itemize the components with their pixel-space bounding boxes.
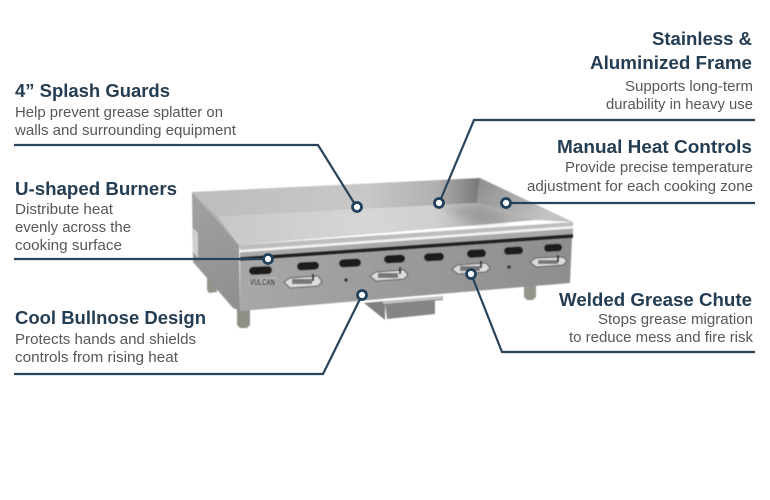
callout: stainless and aluminized frame: Stainless & bbox=[652, 29, 752, 49]
callout: manual heat controls bbox=[502, 137, 755, 208]
callout: stainless and aluminized frame: Supports long-term bbox=[625, 79, 753, 95]
callout: welded grease chute: to reduce mess and fire risk bbox=[569, 330, 754, 346]
callout: splash guards: walls and surrounding equipment bbox=[14, 123, 236, 139]
griddle front lip bbox=[239, 222, 573, 250]
callout: splash guards: Help prevent grease splatter on bbox=[15, 105, 223, 121]
griddle left splash guard bbox=[192, 192, 239, 245]
griddle front panel bbox=[240, 238, 572, 311]
brand badge bbox=[249, 277, 276, 287]
griddle cooking surface bbox=[218, 203, 537, 245]
griddle legs bbox=[207, 278, 536, 328]
control knob vents bbox=[249, 244, 562, 275]
callout: cool bullnose design: Cool Bullnose Design bbox=[15, 308, 206, 328]
grease chute bbox=[364, 296, 443, 320]
callout: welded grease chute bbox=[466, 270, 755, 352]
callout: splash guards: 4” Splash Guards bbox=[15, 81, 170, 101]
griddle product image bbox=[192, 178, 573, 328]
callout: cool bullnose design: Protects hands and shields bbox=[15, 332, 196, 348]
callout: cool bullnose design: controls from rising heat bbox=[15, 350, 178, 366]
callout: welded grease chute: Welded Grease Chute bbox=[559, 290, 752, 310]
callout: cool bullnose design bbox=[14, 290, 366, 374]
callout: manual heat controls: adjustment for each cooking zone bbox=[527, 179, 753, 195]
griddle side panel bbox=[192, 192, 240, 311]
callout: manual heat controls: Manual Heat Controls bbox=[557, 137, 752, 157]
callout: u-shaped burners: cooking surface bbox=[15, 238, 122, 254]
callout: stainless and aluminized frame: durability in heavy use bbox=[606, 97, 753, 113]
callout: stainless and aluminized frame bbox=[434, 29, 755, 208]
callout: u-shaped burners: Distribute heat bbox=[15, 202, 113, 218]
griddle back splash guard bbox=[192, 178, 480, 217]
callout: u-shaped burners bbox=[14, 179, 272, 264]
callout: splash guards bbox=[14, 81, 362, 212]
callout: u-shaped burners: evenly across the bbox=[15, 220, 131, 236]
manual heat control handles bbox=[284, 257, 567, 288]
brand badge: VULCAN bbox=[250, 278, 275, 287]
callout: welded grease chute: Stops grease migration bbox=[598, 312, 753, 328]
callout: stainless and aluminized frame: Aluminized Frame bbox=[590, 53, 752, 73]
callout: u-shaped burners: U-shaped Burners bbox=[15, 179, 177, 199]
callout: manual heat controls: Provide precise temperature bbox=[565, 160, 753, 176]
griddle right splash guard bbox=[477, 178, 573, 222]
